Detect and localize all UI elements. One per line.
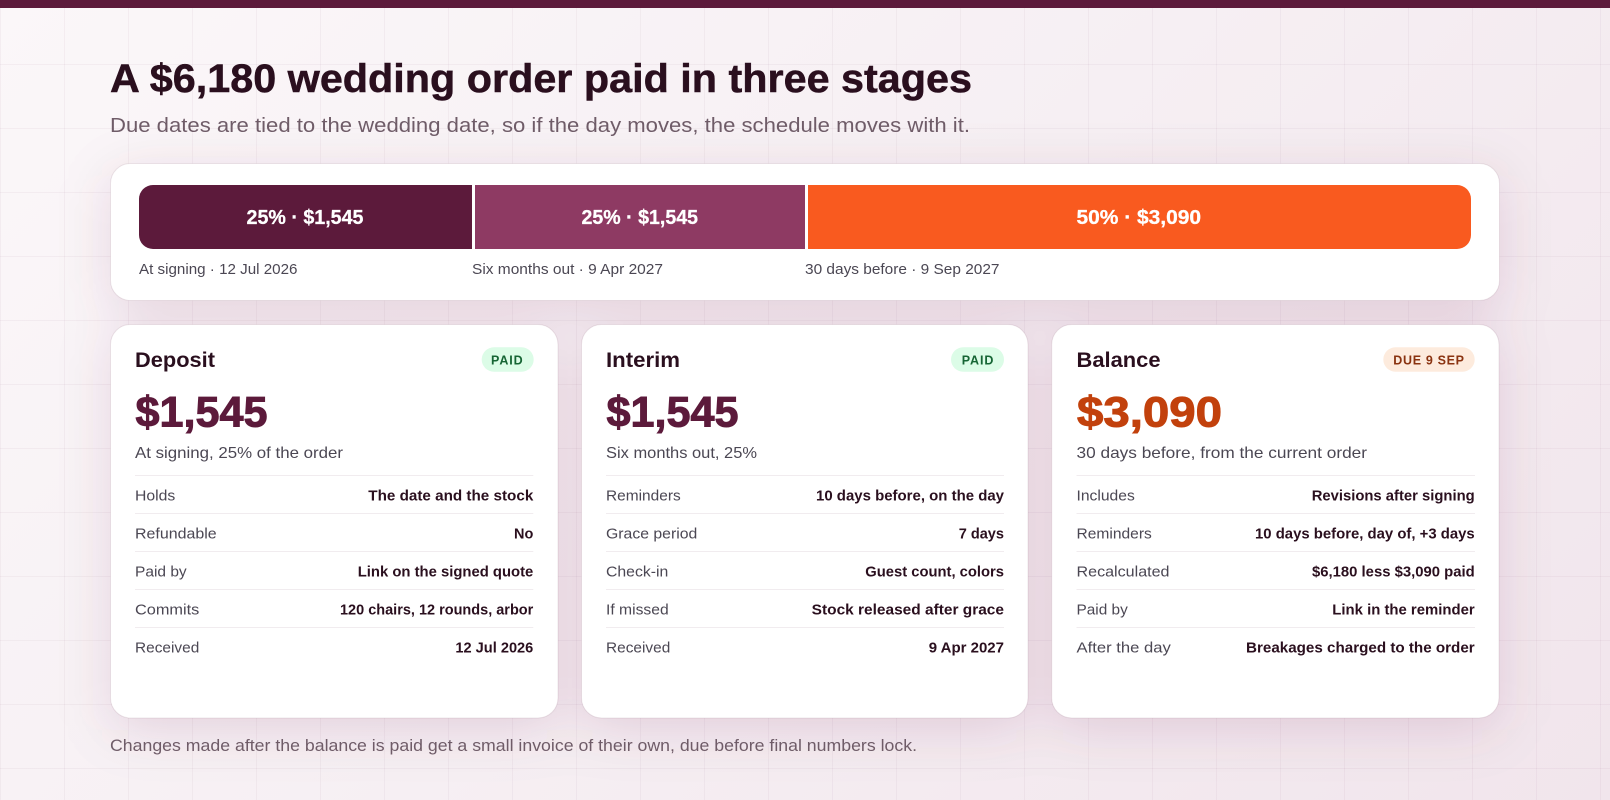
bar segment: balance 50%: 50% · $3,090 xyxy=(1076,207,1201,229)
bar caption: six months out: Six months out · 9 Apr 2027 xyxy=(472,261,663,278)
status pill: paid: PAID xyxy=(491,353,523,367)
row: reminders: 10 days before, day of, +3 days xyxy=(1255,525,1475,542)
row: recalculated: Recalculated xyxy=(1076,563,1170,580)
row: paid by xyxy=(135,563,533,580)
row: commits xyxy=(135,601,533,618)
row: refundable: Refundable xyxy=(135,525,217,542)
row: holds: Holds xyxy=(135,487,175,504)
bar caption: 30 days before: 30 days before · 9 Sep 2027 xyxy=(805,261,1000,278)
panel: deposit card xyxy=(110,324,558,718)
row: check-in: Check-in xyxy=(606,563,668,580)
row: reminders xyxy=(606,487,1005,504)
row: received: 12 Jul 2026 xyxy=(455,639,533,656)
row: paid by: Link on the signed quote xyxy=(358,563,533,580)
row: commits: 120 chairs, 12 rounds, arbor xyxy=(340,601,533,618)
row: if missed: If missed xyxy=(606,601,669,618)
row: grace period: 7 days xyxy=(959,525,1004,542)
panel: payment split bar xyxy=(110,164,1500,300)
row: reminders: Reminders xyxy=(606,487,681,504)
row: paid by: Paid by xyxy=(135,563,187,580)
row: refundable xyxy=(135,525,533,542)
bar segment: deposit 25% xyxy=(139,185,472,249)
row: refundable: No xyxy=(514,525,533,542)
panel: balance card xyxy=(1052,324,1499,718)
amount: $3,090 xyxy=(1077,389,1222,437)
title: A $6,180 wedding order paid in three stages xyxy=(110,57,972,101)
row: received: Received xyxy=(606,639,670,656)
top accent band xyxy=(0,0,1610,8)
status pill: due 9 sep: DUE 9 SEP xyxy=(1393,353,1464,367)
row: received: Received xyxy=(135,639,199,656)
panel: interim card xyxy=(582,324,1028,718)
row: recalculated xyxy=(1076,563,1475,580)
row: check-in xyxy=(606,563,1004,580)
row: includes: Revisions after signing xyxy=(1312,487,1475,504)
row: recalculated: $6,180 less $3,090 paid xyxy=(1312,563,1475,580)
row: paid by: Paid by xyxy=(1076,601,1128,618)
status pill: paid xyxy=(482,347,534,372)
row: commits: Commits xyxy=(135,601,199,618)
row: reminders xyxy=(1076,525,1475,542)
row: holds xyxy=(135,487,534,504)
row: grace period xyxy=(606,525,1004,542)
row: grace period: Grace period xyxy=(606,525,697,542)
timing note: 30 days before, from the current order xyxy=(1076,445,1368,462)
row: reminders: Reminders xyxy=(1076,525,1152,542)
bar segment: interim 25%: 25% · $1,545 xyxy=(582,207,698,229)
footnote: Changes made after the balance is paid get a small invoice of their own, due before final numbers lock. xyxy=(110,736,917,755)
row: received: 9 Apr 2027 xyxy=(929,639,1004,656)
heading: balance: Balance xyxy=(1076,349,1160,372)
amount: $1,545 xyxy=(136,389,268,437)
row: reminders: 10 days before, on the day xyxy=(816,487,1005,504)
row: paid by xyxy=(1076,601,1475,618)
bar segment: interim 25% xyxy=(475,185,805,249)
row: check-in: Guest count, colors xyxy=(865,563,1004,580)
row: holds: The date and the stock xyxy=(368,487,534,504)
row: if missed xyxy=(606,601,1004,618)
subtitle: Due dates are tied to the wedding date, so if the day moves, the schedule moves with it. xyxy=(110,115,970,137)
status pill: paid xyxy=(951,347,1004,372)
timing note: At signing, 25% of the order xyxy=(135,445,344,462)
status pill: paid: PAID xyxy=(962,353,993,367)
row: after the day: After the day xyxy=(1076,639,1171,656)
status pill: due 9 sep xyxy=(1383,347,1475,372)
row: received xyxy=(135,639,533,656)
bar segment: balance 50% xyxy=(808,185,1471,249)
row: if missed: Stock released after grace xyxy=(812,601,1004,618)
bar segment: deposit 25%: 25% · $1,545 xyxy=(246,207,364,229)
row: after the day: Breakages charged to the order xyxy=(1246,639,1475,656)
row: received xyxy=(606,639,1004,656)
row: includes xyxy=(1076,487,1475,504)
timing note: Six months out, 25% xyxy=(606,445,757,462)
row: includes: Includes xyxy=(1076,487,1135,504)
heading: deposit: Deposit xyxy=(135,349,215,372)
bar caption: at signing: At signing · 12 Jul 2026 xyxy=(139,261,298,278)
row: paid by: Link in the reminder xyxy=(1332,601,1475,618)
heading: interim: Interim xyxy=(606,349,680,372)
amount: $1,545 xyxy=(606,389,738,437)
row: after the day xyxy=(1076,639,1475,656)
